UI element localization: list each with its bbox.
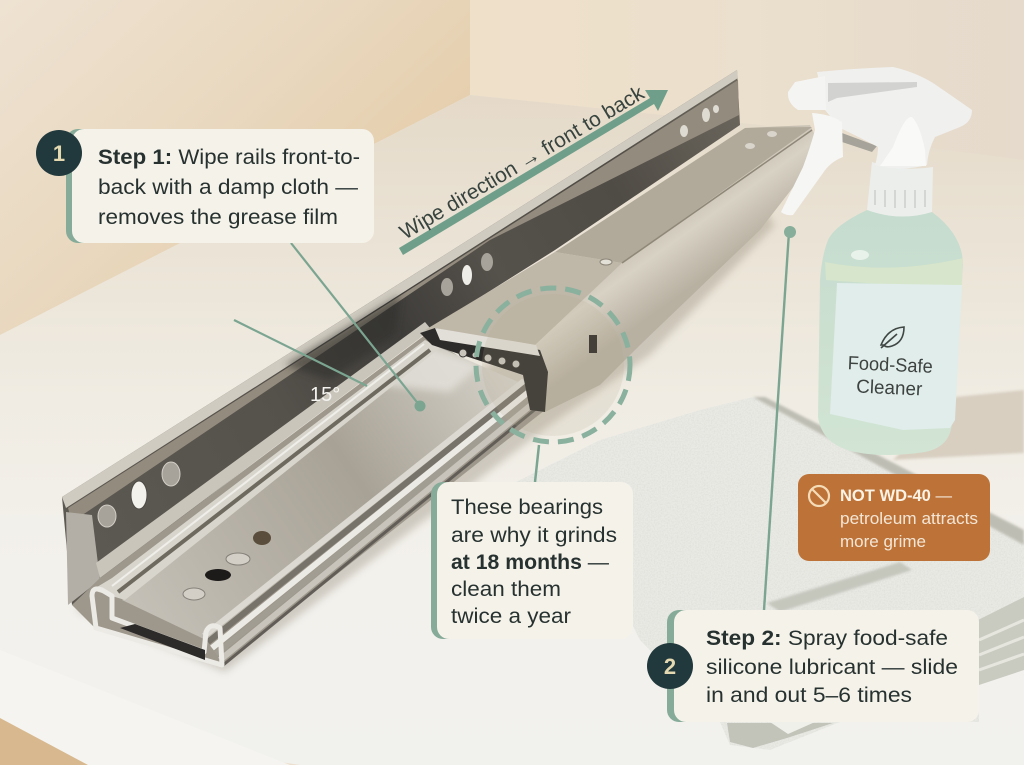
angle indicator 15 degrees: 15° — [310, 384, 340, 406]
wipe direction arrow — [396, 81, 668, 255]
step 2 text: silicone lubricant — slide — [706, 656, 958, 679]
spring — [842, 133, 877, 152]
drawer slide rail — [62, 70, 822, 672]
step 1 text: removes the grease film — [98, 206, 338, 229]
warning text — [840, 487, 978, 551]
step 2 text — [706, 627, 958, 707]
bearings text: twice a year — [451, 604, 571, 628]
bottle label — [830, 283, 962, 430]
callout: bearings — [431, 482, 633, 639]
inner channel floor — [72, 335, 545, 665]
bearings text: clean them — [451, 577, 561, 601]
left inner rail — [92, 340, 440, 600]
step 2 badge — [647, 643, 693, 689]
label text — [847, 353, 933, 400]
floor holes and debris — [183, 531, 271, 600]
callout: step 1 — [36, 129, 374, 243]
trigger head — [817, 67, 972, 168]
collar — [867, 162, 933, 217]
outer channel wall — [62, 70, 740, 605]
leader: step 2 to sprayer — [764, 226, 796, 610]
warning: not WD-40 — [798, 474, 990, 561]
icon: leaf — [881, 327, 904, 348]
step 2 text: in and out 5–6 times — [706, 684, 912, 707]
leader: step 1 to rail — [291, 243, 426, 412]
bearing cage — [420, 328, 548, 412]
warning text: more grime — [840, 533, 926, 551]
step 1 text: Step 1: Wipe rails front-to- — [98, 146, 360, 169]
spray bottle — [781, 67, 972, 455]
icon: prohibited — [809, 486, 829, 506]
callout: step 2 — [647, 610, 979, 722]
screws and holes on outer wall — [98, 105, 719, 527]
bearings text: at 18 months — — [451, 550, 609, 574]
sliding block — [530, 125, 822, 412]
nozzle — [788, 76, 826, 110]
front end profile — [92, 589, 222, 665]
bearing highlight circle — [476, 288, 630, 482]
folded towel — [510, 397, 1024, 750]
warning text: NOT WD-40 — — [840, 487, 952, 505]
step 2 badge: 2 — [664, 654, 676, 679]
bearings text: These bearings — [451, 495, 603, 519]
step 1 text: back with a damp cloth — — [98, 176, 358, 199]
bearings text — [451, 495, 617, 628]
step 2 text: Step 2: Spray food-safe — [706, 627, 948, 650]
bottle body — [818, 210, 963, 455]
shadow under rail — [75, 205, 775, 672]
warning text: petroleum attracts — [840, 510, 978, 528]
right inner rail — [204, 381, 538, 666]
label text: Cleaner — [856, 377, 923, 400]
bearings text: are why it grinds — [451, 523, 617, 547]
step 1 text — [98, 146, 360, 229]
wipe direction label: Wipe direction → front to back — [396, 81, 649, 244]
trigger — [781, 113, 843, 215]
label text: Food-Safe — [847, 353, 933, 378]
step 1 badge: 1 — [53, 141, 65, 166]
step 1 badge — [36, 130, 82, 176]
angle indicator 15 degrees — [234, 320, 367, 406]
